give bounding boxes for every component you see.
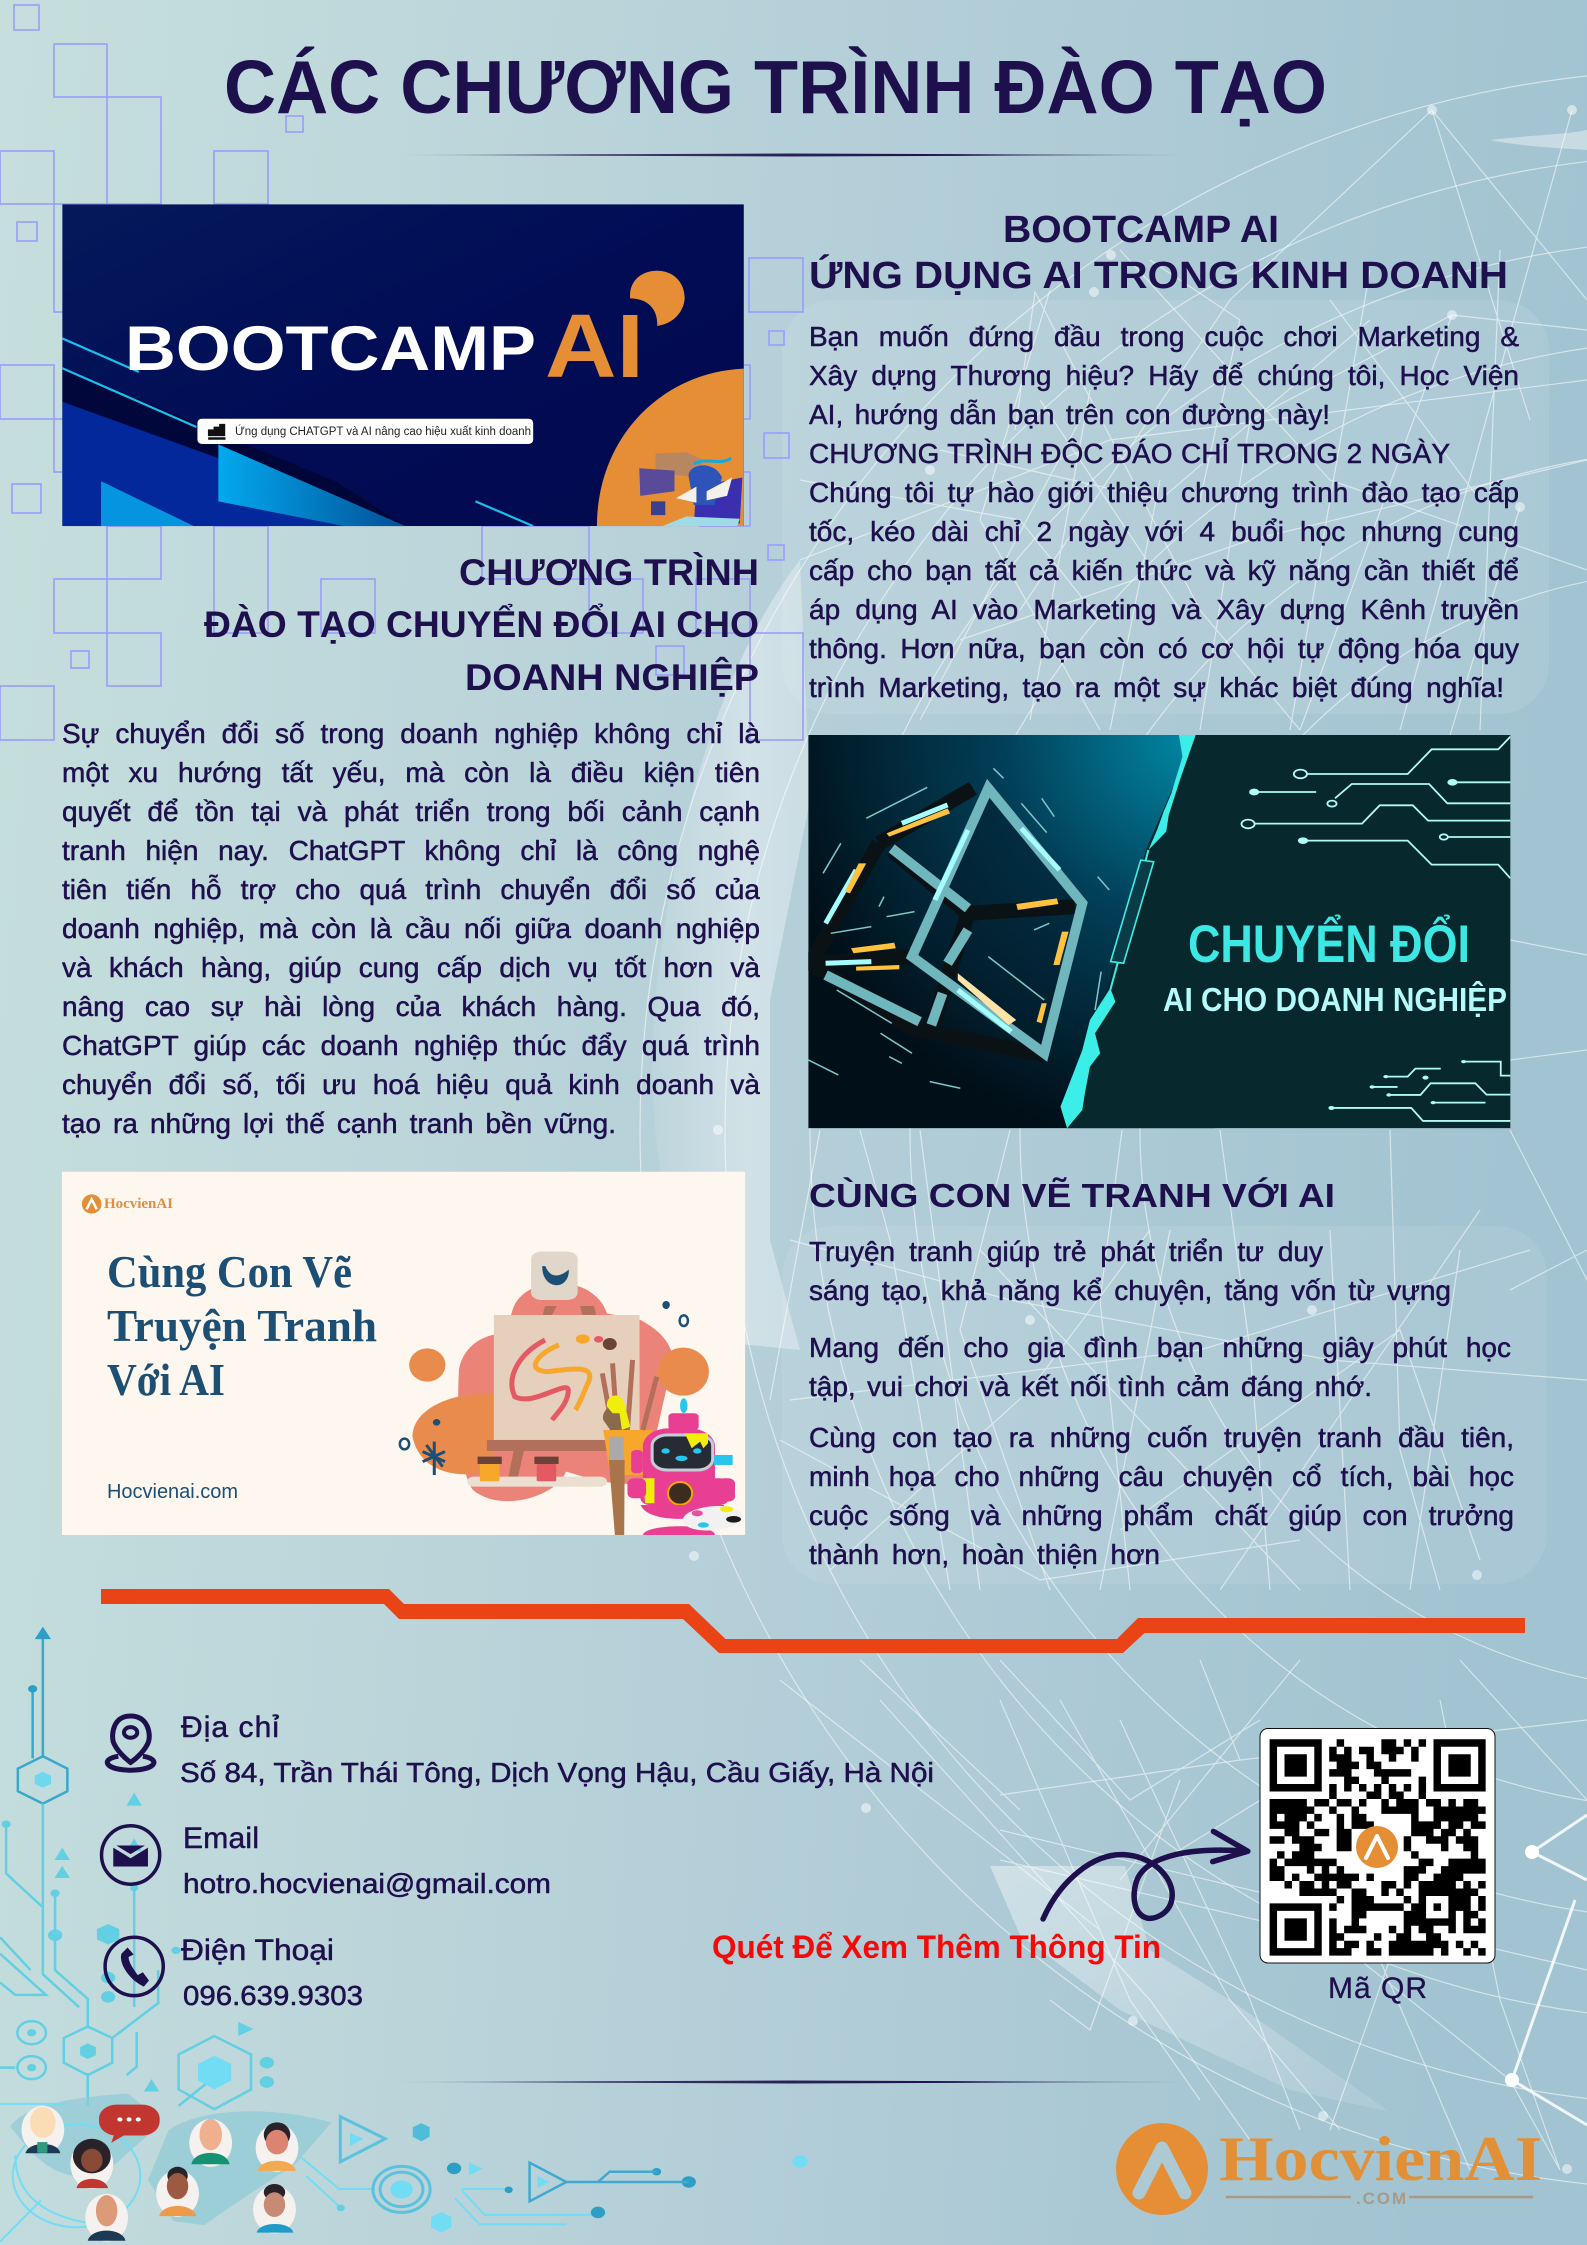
heading: cùng con vẽ tranh: CÙNG CON VẼ TRANH VỚI AI xyxy=(809,1177,1335,1214)
card text: cùng con vẽ: Cùng Con Vẽ xyxy=(107,1246,352,1297)
paragraph: family moments xyxy=(809,1332,1511,1402)
heading: bootcamp AI: ỨNG DỤNG AI TRONG KINH DOANH xyxy=(809,253,1508,297)
paragraph: digital transformation: nâng cao sự hài lòng của khách hàng. Qua đó, xyxy=(62,991,760,1022)
paragraph: digital transformation: một xu hướng tất yếu, mà còn là điều kiện tiên xyxy=(62,757,760,788)
paragraph: bootcamp description: Xây dựng Thương hiệu? Hãy để chúng tôi, Học Viện xyxy=(809,360,1519,391)
contact: address xyxy=(107,1711,934,1788)
paragraph: digital transformation: tranh hiện nay. ChatGPT không chỉ là công nghệ xyxy=(62,835,760,866)
paragraph: bootcamp description: thông. Hơn nữa, bạn còn có cơ hội tự động hóa quy xyxy=(809,633,1519,664)
contact: phone: Điện Thoại xyxy=(181,1934,334,1967)
paragraph: bootcamp description: AI, hướng dẫn bạn trên con đường này! xyxy=(809,399,1330,430)
HocvienAI logo: .COM xyxy=(1356,2189,1406,2208)
banner text: BOOTCAMP AI: Ứng dụng CHATGPT và AI nâng cao hiệu xuất kinh doanh xyxy=(235,425,531,438)
paragraph: bootcamp description: Bạn muốn đứng đầu trong cuộc chơi Marketing & xyxy=(809,321,1519,352)
HocvienAI logo: HocvienAI xyxy=(1219,2123,1542,2194)
contact: email: hotro.hocvienai@gmail.com xyxy=(183,1868,551,1899)
paragraph: comics benefit: sáng tạo, khả năng kể chuyện, tăng vốn từ vựng xyxy=(809,1275,1451,1306)
paragraph: bootcamp description: Chúng tôi tự hào giới thiệu chương trình đào tạo cấp xyxy=(809,477,1519,508)
paragraph: digital transformation xyxy=(62,718,760,1140)
heading: bootcamp AI: BOOTCAMP AI xyxy=(1003,209,1279,251)
card text: cùng con vẽ: Với AI xyxy=(107,1354,225,1405)
paragraph: comics benefit xyxy=(809,1236,1451,1306)
card text: cùng con vẽ: Hocvienai.com xyxy=(107,1481,238,1503)
banner text: BOOTCAMP AI: AI xyxy=(545,297,644,397)
paragraph: digital transformation: quyết để tồn tại và phát triển trong bối cảnh cạnh xyxy=(62,796,760,827)
heading: chương trình đào tạo xyxy=(204,552,759,698)
banner text: BOOTCAMP AI xyxy=(125,297,644,438)
contact: phone xyxy=(105,1934,363,2011)
paragraph: bootcamp description xyxy=(809,321,1519,704)
contact: phone: 096.639.9303 xyxy=(183,1980,363,2011)
title underline xyxy=(384,154,1204,156)
heading: chương trình đào tạo: DOANH NGHIỆP xyxy=(465,656,759,698)
heading: bootcamp AI xyxy=(809,209,1508,297)
paragraph: first comics: thành hơn, hoàn thiện hơn xyxy=(809,1539,1160,1570)
card text: cùng con vẽ: Truyện Tranh xyxy=(107,1300,377,1351)
paragraph: digital transformation: tiên tiến hỗ trợ cho quá trình chuyển đổi số của xyxy=(62,874,760,905)
paragraph: digital transformation: Sự chuyển đổi số trong doanh nghiệp không chỉ là xyxy=(62,718,760,749)
decorative squares xyxy=(0,5,803,740)
paragraph: digital transformation: ChatGPT giúp các doanh nghiệp thúc đẩy quá trình xyxy=(62,1030,760,1061)
HocvienAI logo xyxy=(1116,2123,1542,2215)
contact: email xyxy=(102,1822,551,1899)
heading: chương trình đào tạo: ĐÀO TẠO CHUYỂN ĐỔI AI CHO xyxy=(204,602,759,645)
paragraph: bootcamp description: cấp cho bạn tất cả kiến thức và kỹ năng cần thiết để xyxy=(809,555,1519,586)
tech circuit and people decoration xyxy=(0,1627,808,2242)
paragraph: bootcamp description: trình Marketing, tạo ra một sự khác biệt đúng nghĩa! xyxy=(809,672,1504,703)
image: Bootcamp AI banner xyxy=(62,204,744,526)
icon: phone xyxy=(105,1937,163,1996)
banner text: BOOTCAMP AI: BOOTCAMP xyxy=(125,314,536,384)
paragraph: bootcamp description: áp dụng AI vào Marketing và Xây dựng Kênh truyền xyxy=(809,594,1519,625)
banner text: chuyển đổi: AI CHO DOANH NGHIỆP xyxy=(1163,981,1507,1018)
paragraph: first comics: cuộc sống và những phẩm chất giúp con trưởng xyxy=(809,1500,1514,1531)
paragraph: digital transformation: doanh nghiệp, mà còn là cầu nối giữa doanh nghiệp xyxy=(62,913,760,944)
paragraph: digital transformation: chuyển đổi số, tối ưu hoá hiệu quả kinh doanh và xyxy=(62,1069,760,1100)
paragraph: bootcamp description: tốc, kéo dài chỉ 2 ngày với 4 buổi học nhưng cung xyxy=(809,516,1519,547)
card text: cùng con vẽ xyxy=(104,1196,377,1503)
QR caption: Mã QR xyxy=(1328,1972,1427,2005)
banner text: chuyển đổi: CHUYỂN ĐỔI xyxy=(1188,914,1470,974)
globe network pattern xyxy=(640,70,1587,2190)
paragraph: first comics: minh họa cho những câu chuyện cổ tích, bài học xyxy=(809,1461,1514,1492)
icon: location pin xyxy=(107,1716,154,1770)
icon: envelope xyxy=(102,1826,160,1884)
paragraph: digital transformation: tạo ra những lợi thế cạnh tranh bền vững. xyxy=(62,1108,616,1139)
card text: cùng con vẽ: HocvienAI xyxy=(104,1196,173,1212)
paragraph: comics benefit: Truyện tranh giúp trẻ phát triển tư duy xyxy=(809,1236,1323,1267)
paragraph: digital transformation: và khách hàng, giúp cung cấp dịch vụ tốt hơn và xyxy=(62,952,760,983)
image: drawing comics with AI card xyxy=(62,1172,745,1535)
contact: address: Địa chỉ xyxy=(181,1711,279,1744)
call to action: Quét Để Xem Thêm Thông Tin xyxy=(712,1929,1161,1965)
paragraph: first comics: Cùng con tạo ra những cuốn truyện tranh đầu tiên, xyxy=(809,1422,1514,1453)
banner text: chuyển đổi xyxy=(1163,914,1507,1018)
arrow xyxy=(1043,1831,1248,1919)
paragraph: first comics xyxy=(809,1422,1514,1570)
paragraph: family moments: Mang đến cho gia đình bạn những giây phút học xyxy=(809,1332,1511,1363)
paragraph: bootcamp description: CHƯƠNG TRÌNH ĐỘC ĐÁO CHỈ TRONG 2 NGÀY xyxy=(809,438,1450,469)
title: CÁC CHƯƠNG TRÌNH ĐÀO TẠO xyxy=(224,45,1327,129)
orange divider band xyxy=(101,1589,1525,1653)
contact: email: Email xyxy=(183,1822,259,1855)
contact: address: Số 84, Trần Thái Tông, Dịch Vọng Hậu, Cầu Giấy, Hà Nội xyxy=(180,1757,934,1788)
paragraph: family moments: tập, vui chơi và kết nối tình cảm đáng nhớ. xyxy=(809,1371,1372,1402)
footer rule xyxy=(383,2080,1204,2084)
image: AI transformation banner xyxy=(808,735,1510,1128)
heading: chương trình đào tạo: CHƯƠNG TRÌNH xyxy=(459,552,759,593)
QR code xyxy=(1260,1728,1495,1963)
